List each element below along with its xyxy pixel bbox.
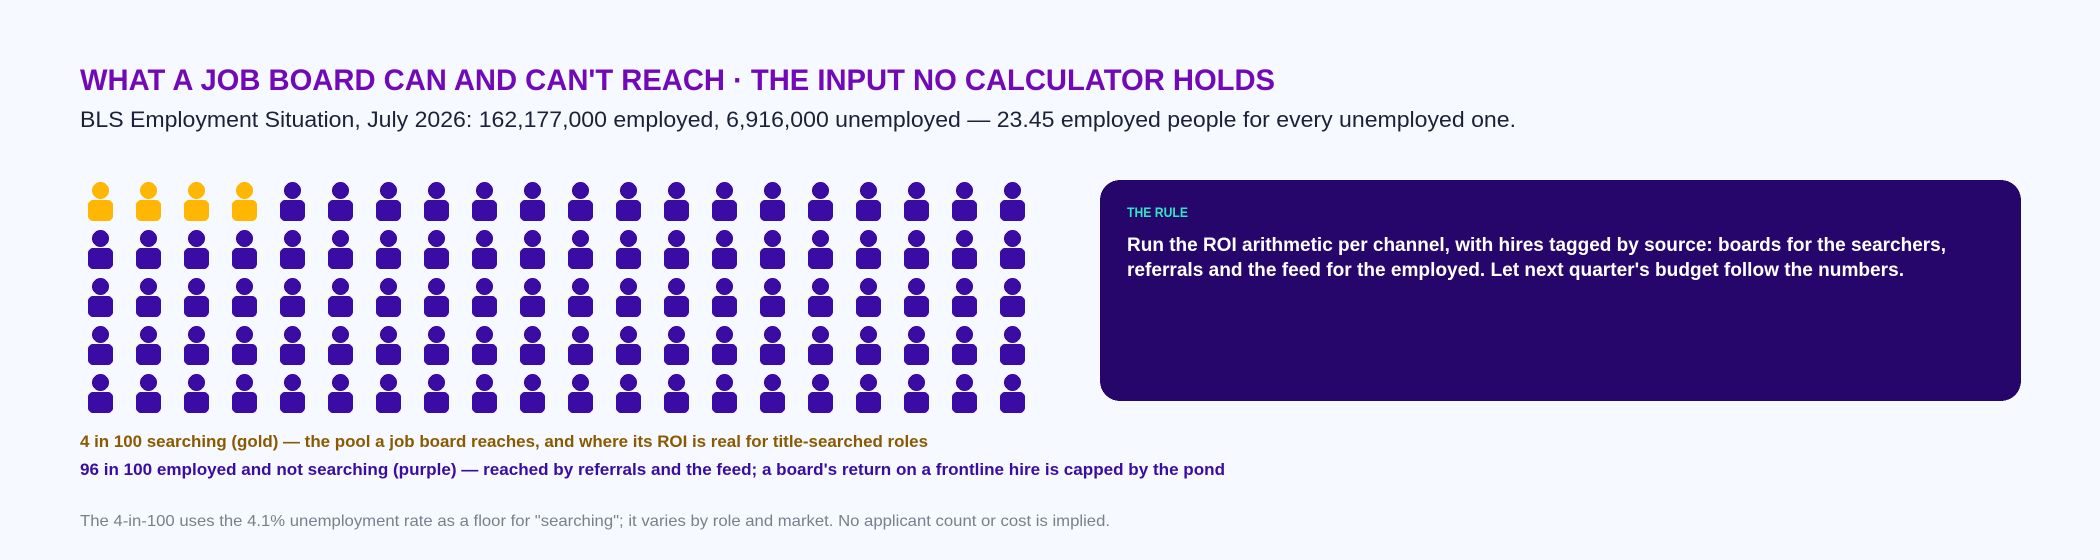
- panel: the rule: [1100, 180, 2021, 401]
- title: WHAT A JOB BOARD CAN AND CAN'T REACH · THE INPUT NO CALCULATOR HOLDS: [80, 64, 1275, 97]
- panel label: THE RULE: [1127, 204, 1188, 220]
- pictogram: 100 people, 4 gold and 96 purple: [88, 182, 1025, 413]
- legend: gold: 4 in 100 searching (gold) — the pool a job board reaches, and where its ROI is real for title-searched roles: [80, 432, 928, 451]
- panel body text: referrals and the feed for the employed. Let next quarter's budget follow the numbers.: [1127, 260, 1904, 281]
- subtitle: BLS Employment Situation, July 2026: 162,177,000 employed, 6,916,000 unemployed — 23.45 employed people for every unemployed one.: [80, 107, 1516, 132]
- legend: purple: 96 in 100 employed and not searching (purple) — reached by referrals and the feed; a board's return on a frontline hire is capped by the pond: [80, 460, 1225, 479]
- footnote: The 4-in-100 uses the 4.1% unemployment rate as a floor for "searching"; it varies by role and market. No applicant count or cost is implied.: [80, 513, 1110, 530]
- panel body text: Run the ROI arithmetic per channel, with hires tagged by source: boards for the searchers,: [1127, 235, 1946, 256]
